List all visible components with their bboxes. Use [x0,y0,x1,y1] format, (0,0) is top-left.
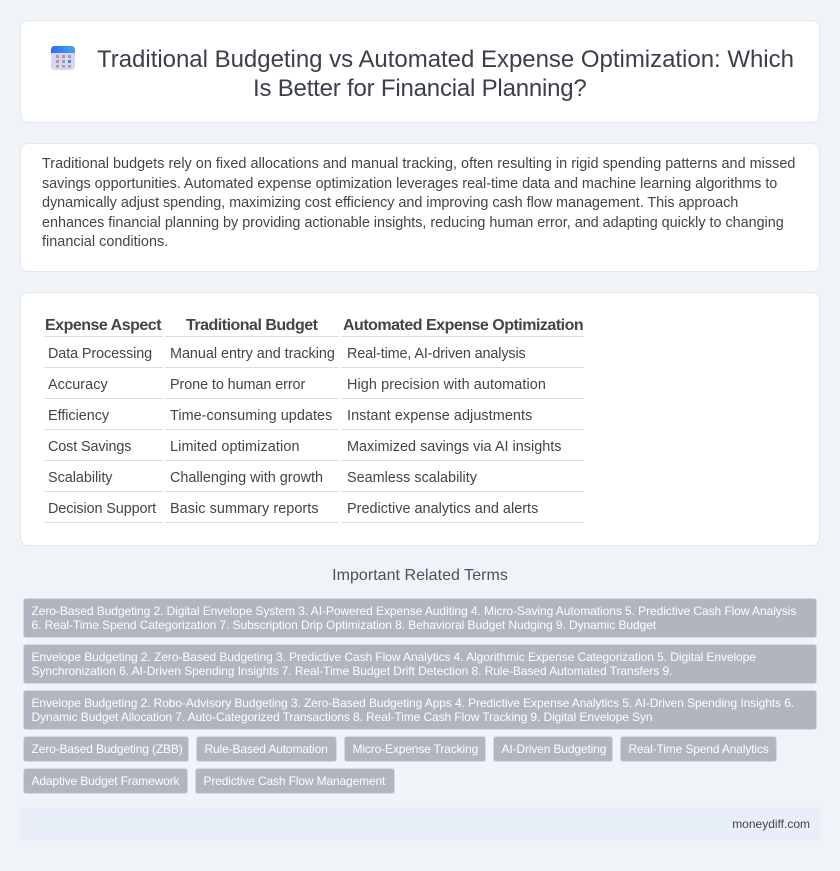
tag 1: 6. Real-Time Spend Categorization 7. Subscription Drip Optimization 8. Behavioral Budget Nudging 9. Dynamic Budget [32,618,656,632]
tag 1 [23,598,817,638]
text block: intro: financial conditions. [42,234,168,250]
tag 3: Dynamic Budget Allocation 7. Auto-Categorized Transactions 8. Real-Time Cash Flow Tracking 9. Digital Envelope Syn [32,710,652,724]
row: decision support: Decision Support [48,501,156,517]
row: data processing: Manual entry and tracking [170,346,335,362]
footer [20,807,820,841]
row: efficiency: Instant expense adjustments [347,408,532,424]
table header: Traditional Budget [186,317,317,334]
text block: intro: Traditional budgets rely on fixed allocations and manual tracking, often resulting in rigid spending patterns and missed [42,156,795,172]
tag 6 [344,736,486,762]
row: scalability: Seamless scalability [347,470,477,486]
row: data processing: Data Processing [48,346,152,362]
tag 10: Predictive Cash Flow Management [204,774,385,788]
table header [45,317,583,334]
panel: title header [20,20,820,123]
title: Traditional Budgeting vs Automated Expense Optimization: Which [97,46,794,73]
table header: Automated Expense Optimization [343,317,583,334]
row: cost savings: Limited optimization [170,439,300,455]
icon: calendar [51,46,75,70]
row: decision support: Basic summary reports [170,501,319,517]
row: efficiency: Efficiency [48,408,109,424]
row: accuracy: Prone to human error [170,377,305,393]
row: cost savings [48,439,562,455]
title [97,46,794,102]
row: efficiency: Time-consuming updates [170,408,332,424]
title: Is Better for Financial Planning? [253,75,587,102]
row: decision support [48,501,538,517]
row: data processing: Real-time, AI-driven analysis [347,346,526,362]
table: comparison [44,317,584,523]
tag 8 [620,736,777,762]
tag 5 [196,736,337,762]
tag 9 [23,768,188,794]
tag 2: Synchronization 6. AI-Driven Spending Insights 7. Real-Time Budget Drift Detection 8. Rule-Based Automated Transfers 9. [32,664,672,678]
text block: intro: savings opportunities. Automated expense optimization leverages real-time data and machine learning algorithms to [42,176,777,192]
table header: Expense Aspect [45,317,161,334]
footer source: moneydiff.com [732,817,810,831]
panel: related term tags [23,598,817,794]
tag 2: Envelope Budgeting 2. Zero-Based Budgeting 3. Predictive Cash Flow Analytics 4. Algorithmic Expense Categorization 5. Digital Envelope [32,650,756,664]
text block: intro: enhances financial planning by providing actionable insights, reducing human error, and adapting quickly to changing [42,214,784,230]
text block: intro [42,156,795,250]
row: scalability: Challenging with growth [170,470,323,486]
tag 4: Zero-Based Budgeting (ZBB) [32,742,183,756]
tag 4 [23,736,189,762]
row: accuracy: High precision with automation [347,377,546,393]
row: accuracy [48,377,546,393]
tag 2 [23,644,817,684]
panel: intro text [20,143,820,272]
row: cost savings: Cost Savings [48,439,131,455]
tag 7: AI-Driven Budgeting [502,742,606,756]
row: data processing [48,346,526,362]
tag 3: Envelope Budgeting 2. Robo-Advisory Budgeting 3. Zero-Based Budgeting Apps 4. Predictive Expense Analytics 5. AI-Driven Spending Insights 6. [32,696,794,710]
row: accuracy: Accuracy [48,377,108,393]
tag 9: Adaptive Budget Framework [32,774,179,788]
text block: intro: dynamically adjust spending, maximizing cost efficiency and improving cash flow management. This approach [42,195,738,211]
tag 1: Zero-Based Budgeting 2. Digital Envelope System 3. AI-Powered Expense Auditing 4. Micro-Saving Automations 5. Predictive Cash Flow Analysis [32,604,796,618]
row: scalability [48,470,477,486]
tag 3 [23,690,817,730]
tag 7 [493,736,613,762]
panel: comparison table [20,292,820,546]
row: cost savings: Maximized savings via AI insights [347,439,562,455]
tag 10 [195,768,395,794]
tag 5: Rule-Based Automation [204,742,328,756]
row: decision support: Predictive analytics and alerts [347,501,538,517]
heading: related terms: Important Related Terms [332,567,508,584]
tag 8: Real-Time Spend Analytics [628,742,769,756]
row: scalability: Scalability [48,470,112,486]
row: efficiency [48,408,532,424]
tag 6: Micro-Expense Tracking [352,742,478,756]
